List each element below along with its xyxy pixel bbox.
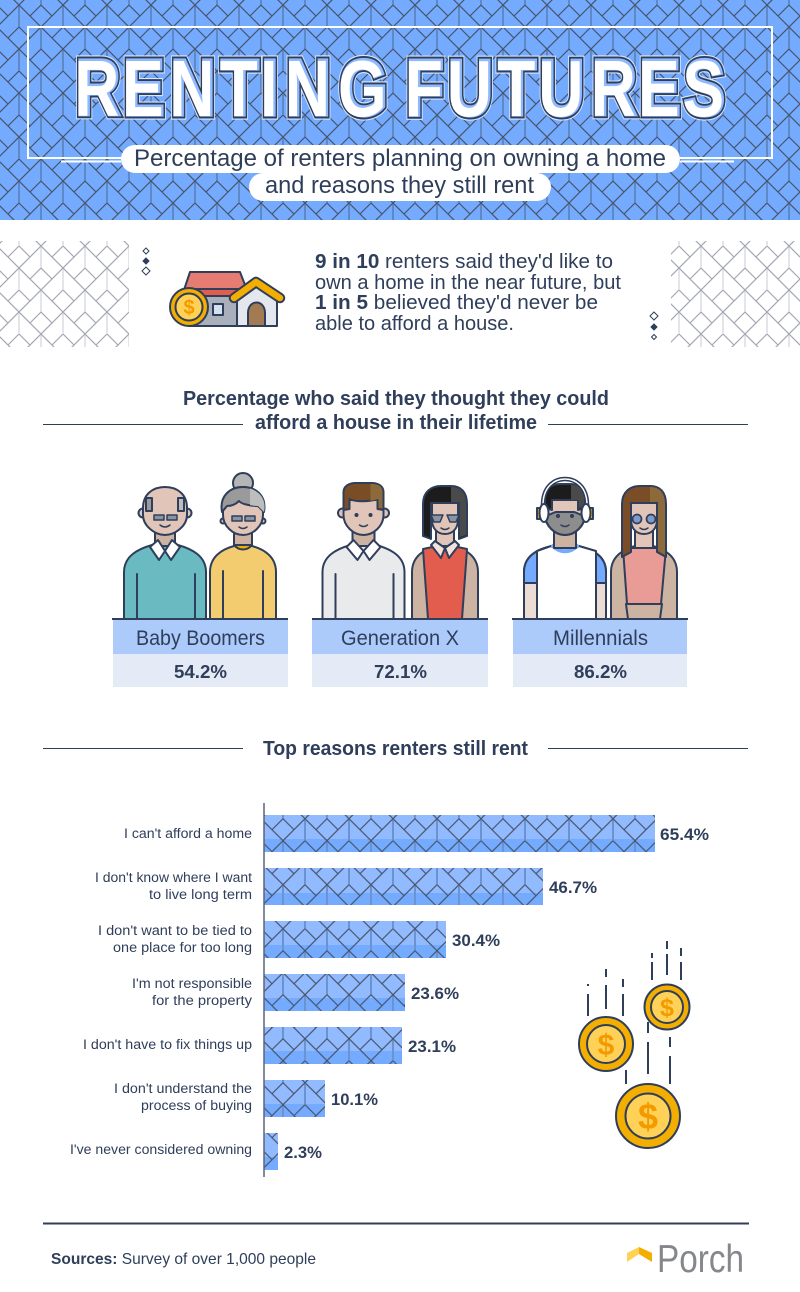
bar: don't know where: to live long term (149, 887, 252, 902)
logo: porch: Porch (657, 1238, 744, 1281)
person: gen x man (322, 483, 404, 619)
title: RENTINGFUTURES (76, 44, 725, 133)
heading: affordability: afford a house in their lifetime (255, 412, 537, 434)
bar: never considered (70, 1133, 322, 1170)
bar: don't know where: I don't know where I want (95, 870, 252, 885)
coin: top right: $ (660, 994, 674, 1022)
bar: fix things (83, 1027, 456, 1064)
icon: falling coins (579, 941, 690, 1148)
coin: bottom (616, 1084, 680, 1148)
card: baby boomers (112, 619, 288, 687)
card: millennials: 86.2% (574, 662, 627, 682)
bar: never considered: 2.3% (284, 1143, 322, 1162)
bar: tied to one place: 30.4% (452, 931, 500, 950)
bar: fix things: 23.1% (408, 1037, 456, 1056)
card: generation x (312, 619, 488, 687)
coin: bottom: $ (638, 1096, 658, 1137)
intro text: own a home in the near future, but (315, 271, 621, 294)
bar: process of buying (114, 1080, 378, 1117)
bar: process of buying: I don't understand the (114, 1081, 252, 1096)
card: generation x: Generation X (341, 627, 459, 650)
subtitle (121, 145, 680, 201)
person: millennial woman (611, 486, 677, 619)
pattern panel left (0, 241, 129, 347)
bar: process of buying: 10.1% (331, 1090, 378, 1109)
bar: not responsible: 23.6% (411, 984, 459, 1003)
coin: left (579, 1017, 633, 1071)
bar: tied to one place (98, 921, 500, 958)
bar: tied to one place: I don't want to be tied to (98, 923, 252, 938)
intro text (315, 250, 621, 335)
intro text: 1 in 5 believed they'd never be (315, 291, 598, 314)
footer rule (43, 1222, 749, 1224)
pattern panel right (671, 241, 800, 347)
bar: can't afford: I can't afford a home (124, 826, 252, 841)
heading: affordability (43, 388, 748, 434)
icon: house and coin: $ (183, 297, 195, 319)
small diamonds left (142, 248, 150, 275)
bar: don't know where: 46.7% (549, 878, 597, 897)
person: boomer woman (210, 473, 276, 619)
subtitle: and reasons they still rent (265, 172, 534, 199)
heading: affordability: Percentage who said they thought they could (183, 388, 609, 410)
bar: tied to one place: one place for too long (113, 940, 252, 955)
intro text: able to afford a house. (315, 312, 514, 335)
bar: not responsible (132, 974, 459, 1011)
bar: never considered: I've never considered owning (70, 1142, 252, 1157)
small diamonds right (650, 312, 658, 340)
subtitle: Percentage of renters planning on owning a home (134, 145, 666, 172)
header frame (28, 27, 772, 162)
coin: top right (644, 984, 690, 1030)
person: boomer man (124, 487, 206, 619)
card: generation x: 72.1% (374, 662, 427, 682)
card: baby boomers: 54.2% (174, 662, 227, 682)
intro text: 9 in 10 renters said they'd like to (315, 250, 613, 273)
bar: can't afford (124, 815, 709, 852)
card: baby boomers: Baby Boomers (136, 627, 265, 650)
bar chart (70, 803, 709, 1177)
heading: top reasons: Top reasons renters still rent (263, 738, 528, 760)
bar: don't know where (95, 868, 597, 905)
bar: process of buying: process of buying (141, 1098, 252, 1113)
sources: Sources: Survey of over 1,000 people (51, 1251, 316, 1268)
chart axis (263, 803, 265, 1177)
icon: house and coin (170, 272, 280, 326)
bar: fix things: I don't have to fix things up (83, 1037, 252, 1052)
logo: porch (627, 1238, 744, 1281)
bar: not responsible: for the property (152, 993, 252, 1008)
title: RENTINGFUTURES (76, 44, 725, 133)
bar: not responsible: I'm not responsible (132, 976, 252, 991)
bar: can't afford: 65.4% (660, 825, 709, 844)
title: RENTING FUTURES (74, 45, 724, 134)
card: millennials (512, 619, 688, 687)
person: gen x woman (412, 486, 478, 619)
coin: left: $ (598, 1029, 615, 1062)
person: millennial man (524, 479, 606, 619)
card: millennials: Millennials (553, 627, 648, 650)
title: RENTINGFUTURES (76, 44, 725, 133)
header banner (0, 0, 800, 220)
